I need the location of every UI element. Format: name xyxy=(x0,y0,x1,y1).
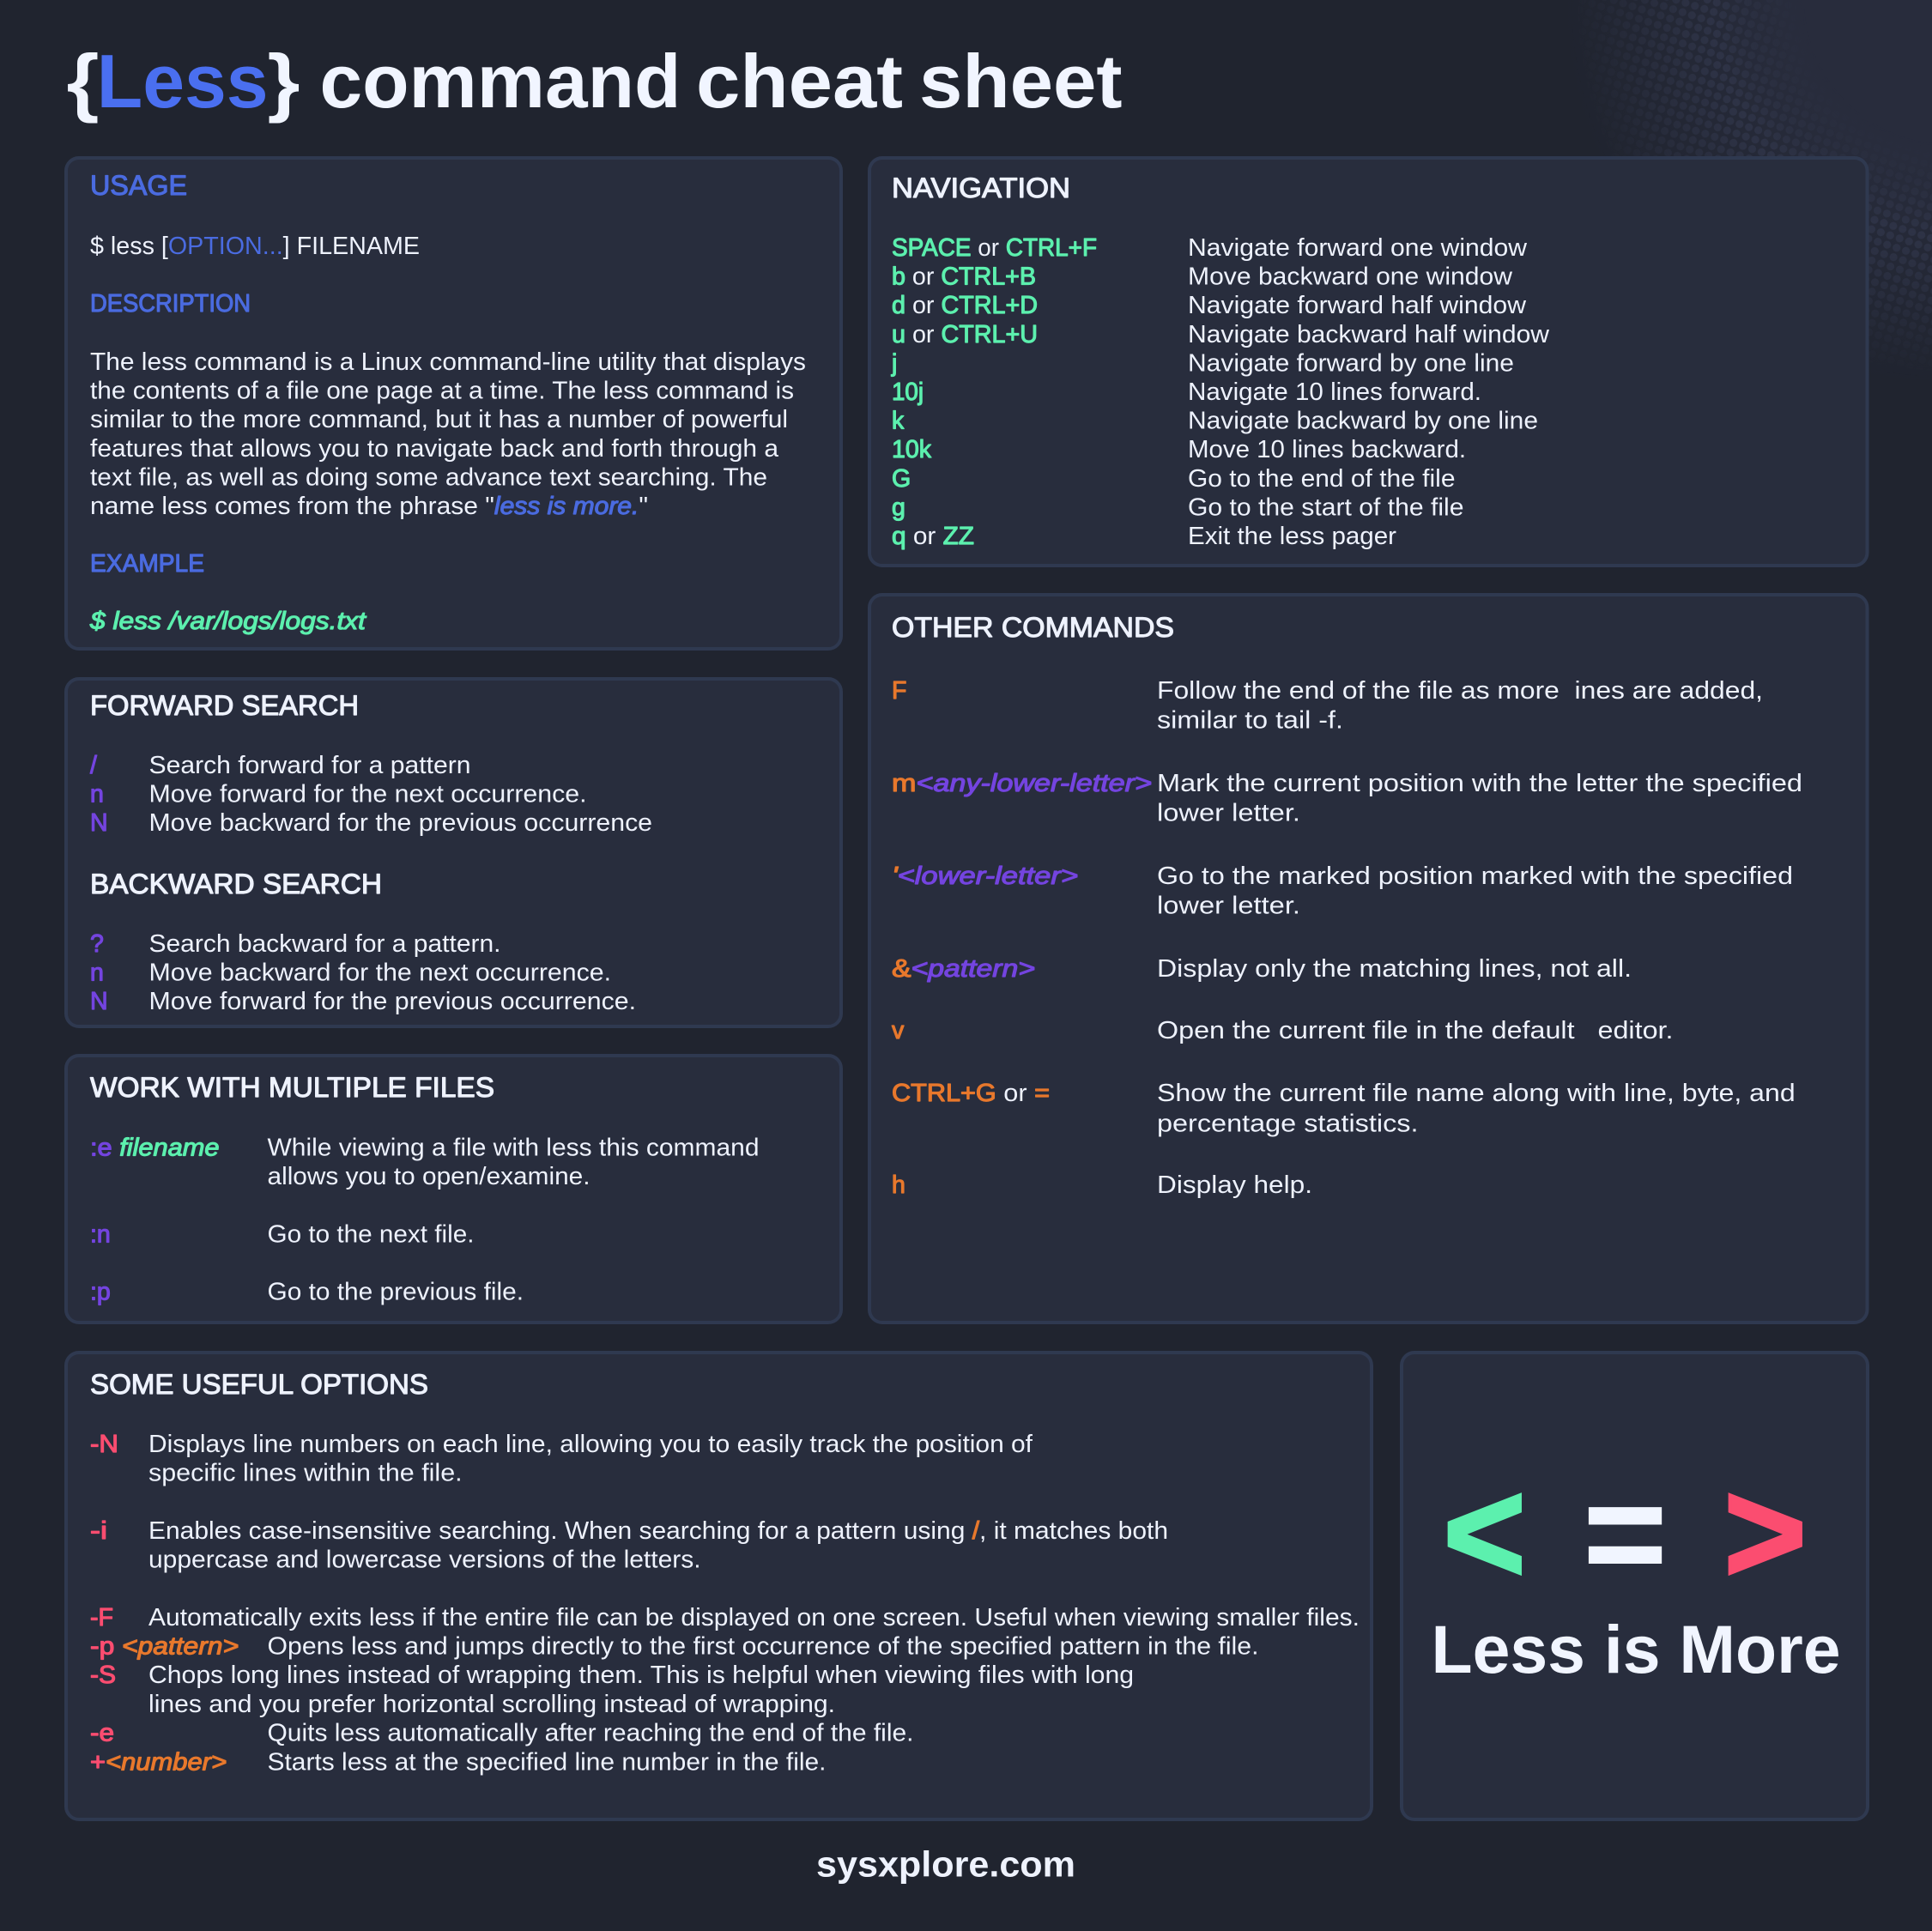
row: filter: Display only the matching lines, not all. xyxy=(1157,955,1632,983)
navigation keys: b or CTRL+B xyxy=(892,263,1036,291)
navigation descriptions: Navigate backward by one line xyxy=(1188,408,1538,435)
option +number: +<number> xyxy=(90,1749,227,1777)
option -N: -N xyxy=(90,1431,118,1458)
option -N xyxy=(90,1431,1033,1487)
option -i: -i xyxy=(90,1517,107,1545)
navigation keys xyxy=(891,234,1097,550)
row: mark xyxy=(892,770,1802,827)
navigation keys: k xyxy=(892,408,905,435)
row: file info: CTRL+G or = xyxy=(892,1080,1050,1107)
option -e: -e xyxy=(90,1719,114,1746)
panel: forward and backward search xyxy=(66,679,841,1026)
row: go to mark xyxy=(892,863,1793,920)
row: next file: :n xyxy=(90,1220,111,1248)
row: follow xyxy=(892,677,1763,735)
backward search rows: Search backward for a pattern. xyxy=(149,930,501,958)
row: examine file: allows you to open/examine. xyxy=(268,1163,591,1190)
example command: $ less /var/logs/logs.txt xyxy=(89,608,366,635)
icon: greater-than symbol: > xyxy=(1724,1450,1807,1613)
title: Less xyxy=(97,39,269,124)
row: mark: Mark the current position with the letter the specified xyxy=(1157,770,1802,797)
row: filter: &<pattern> xyxy=(892,955,1035,983)
backward search rows: Move forward for the previous occurrence. xyxy=(149,988,636,1015)
option -N: Displays line numbers on each line, allowing you to easily track the position of xyxy=(148,1431,1033,1458)
forward search rows xyxy=(90,752,652,837)
backward search rows: Move backward for the next occurrence. xyxy=(149,959,611,987)
forward search rows: Move backward for the previous occurrence xyxy=(149,809,652,837)
backward search rows: N xyxy=(90,988,108,1015)
row: follow: Follow the end of the file as more ines are added, xyxy=(1157,677,1763,705)
navigation keys: q or ZZ xyxy=(892,523,974,550)
option -p: Opens less and jumps directly to the first occurrence of the specified pattern in the file. xyxy=(268,1633,1258,1661)
description text: The less command is a Linux command-line utility that displays xyxy=(90,348,806,376)
navigation keys: G xyxy=(892,465,911,493)
navigation descriptions: Navigate 10 lines forward. xyxy=(1188,378,1481,406)
navigation descriptions: Navigate forward one window xyxy=(1188,234,1527,262)
title: } xyxy=(268,39,300,124)
row: file info: Show the current file name along with line, byte, and xyxy=(1157,1080,1796,1107)
row: follow: similar to tail -f. xyxy=(1157,707,1343,735)
row: examine file xyxy=(90,1135,759,1190)
navigation keys: g xyxy=(892,493,905,521)
navigation descriptions: Navigate forward by one line xyxy=(1188,349,1514,377)
row: examine file: :e filename xyxy=(90,1135,220,1162)
option -S: -S xyxy=(90,1662,116,1689)
row: help: Display help. xyxy=(1157,1171,1312,1199)
option -i xyxy=(90,1517,1168,1574)
navigation descriptions: Move backward one window xyxy=(1188,263,1512,291)
description text: features that allows you to navigate back and forth through a xyxy=(90,435,778,463)
navigation descriptions: Go to the end of the file xyxy=(1188,465,1456,493)
row: editor xyxy=(892,1017,1674,1044)
row: help: h xyxy=(892,1171,905,1199)
row: go to mark: lower letter. xyxy=(1157,893,1300,920)
description text: text file, as well as doing some advance text searching. The xyxy=(90,463,767,491)
navigation keys: j xyxy=(891,349,897,377)
row: go to mark: '<lower-letter> xyxy=(892,863,1078,890)
panel: navigation xyxy=(869,158,1868,566)
option -F: -F xyxy=(90,1604,113,1631)
row: help xyxy=(892,1171,1312,1199)
heading: forward search: FORWARD SEARCH xyxy=(90,690,359,721)
navigation keys: d or CTRL+D xyxy=(892,292,1038,319)
row: previous file: Go to the previous file. xyxy=(268,1279,524,1306)
navigation keys: 10j xyxy=(892,378,924,406)
footer: website: sysxplore.com xyxy=(816,1843,1075,1885)
option -S: Chops long lines instead of wrapping them. This is helpful when viewing files with long xyxy=(148,1662,1134,1689)
forward search rows: n xyxy=(90,781,104,808)
row: follow: F xyxy=(892,677,906,705)
backward search rows xyxy=(90,930,636,1015)
navigation keys: 10k xyxy=(892,436,932,463)
icon: less-than symbol: < xyxy=(1444,1450,1526,1613)
title: cheat xyxy=(696,39,903,124)
navigation descriptions: Go to the start of the file xyxy=(1188,493,1464,521)
description text: the contents of a file one page at a time. The less command is xyxy=(90,378,794,405)
row: examine file: While viewing a file with less this command xyxy=(268,1135,759,1162)
option -S: lines and you prefer horizontal scrolling instead of wrapping. xyxy=(148,1691,835,1718)
background xyxy=(1612,0,1932,335)
row: file info xyxy=(892,1080,1796,1138)
option -S xyxy=(90,1662,1134,1718)
heading: example: EXAMPLE xyxy=(90,550,204,578)
option +number: Starts less at the specified line number in the file. xyxy=(268,1749,826,1777)
heading: description: DESCRIPTION xyxy=(90,290,251,318)
panel: work with multiple files xyxy=(66,1056,841,1323)
heading: some useful options: SOME USEFUL OPTIONS xyxy=(90,1369,428,1400)
heading: navigation: NAVIGATION xyxy=(892,173,1070,203)
navigation descriptions: Exit the less pager xyxy=(1188,523,1397,550)
heading: usage: USAGE xyxy=(90,170,187,201)
panel: other commands xyxy=(869,595,1868,1323)
heading: work with multiple files: WORK WITH MULTIPLE FILES xyxy=(90,1072,494,1103)
heading: backward search: BACKWARD SEARCH xyxy=(90,869,382,899)
navigation descriptions: Move 10 lines backward. xyxy=(1188,436,1466,463)
description text: name less comes from the phrase " less is more. " xyxy=(90,493,648,520)
backward search rows: n xyxy=(90,959,104,987)
row: editor: Open the current file in the default editor. xyxy=(1157,1017,1674,1044)
row: filter xyxy=(892,955,1632,983)
option -i: uppercase and lowercase versions of the letters. xyxy=(148,1547,701,1574)
row: next file xyxy=(90,1220,474,1248)
description text xyxy=(90,348,806,520)
navigation keys: u or CTRL+U xyxy=(892,321,1038,348)
navigation keys: SPACE or CTRL+F xyxy=(892,234,1097,262)
forward search rows: / xyxy=(90,752,97,779)
panel: less is more xyxy=(1402,1353,1868,1819)
forward search rows: Move forward for the next occurrence. xyxy=(149,781,587,808)
panel: some useful options xyxy=(66,1353,1372,1819)
row: mark: m<any-lower-letter> xyxy=(892,770,1152,797)
row: file info: percentage statistics. xyxy=(1157,1111,1418,1138)
navigation descriptions: Navigate forward half window xyxy=(1188,292,1526,319)
option -p: -p <pattern> xyxy=(90,1633,239,1661)
title: sheet xyxy=(919,39,1123,124)
panel: usage and description xyxy=(66,158,841,649)
row: previous file xyxy=(90,1279,524,1306)
navigation descriptions xyxy=(1188,234,1549,550)
option -e: Quits less automatically after reaching the end of the file. xyxy=(268,1719,913,1746)
row: go to mark: Go to the marked position marked with the specified xyxy=(1157,863,1793,890)
row: mark: lower letter. xyxy=(1157,800,1300,827)
usage syntax: $ less [OPTION...] FILENAME xyxy=(90,233,420,260)
description text: similar to the more command, but it has a number of powerful xyxy=(90,406,788,433)
option -N: specific lines within the file. xyxy=(148,1460,463,1487)
navigation descriptions: Navigate backward half window xyxy=(1188,321,1549,348)
backward search rows: ? xyxy=(90,930,104,958)
forward search rows: Search forward for a pattern xyxy=(149,752,470,779)
option -i: Enables case-insensitive searching. When searching for a pattern using /, it matches both xyxy=(148,1517,1168,1545)
row: next file: Go to the next file. xyxy=(268,1220,474,1248)
heading: other commands: OTHER COMMANDS xyxy=(892,612,1174,643)
row: previous file: :p xyxy=(90,1279,111,1306)
title: { xyxy=(67,39,100,124)
slogan: Less is More xyxy=(1432,1611,1840,1687)
icon: equals symbol: = xyxy=(1584,1452,1667,1614)
title xyxy=(67,39,1123,124)
title: command xyxy=(319,39,681,124)
forward search rows: N xyxy=(90,809,108,837)
row: editor: v xyxy=(892,1017,905,1044)
option -F: Automatically exits less if the entire file can be displayed on one screen. Useful when viewing smaller files. xyxy=(148,1604,1360,1631)
